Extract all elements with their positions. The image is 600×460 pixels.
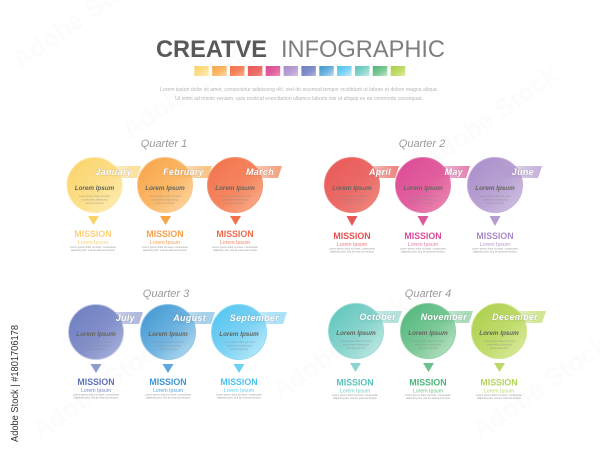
step: December: sed do eiusmod: [490, 346, 509, 350]
intro text: [160, 87, 438, 102]
step: June: Lorem ipsum dolor sit amet, consectetur: [472, 246, 518, 250]
step: July: [68, 304, 143, 400]
step: July: July: [116, 313, 136, 323]
step: July: consectetur adipiscing: [83, 344, 109, 348]
title: CREATVE: [156, 36, 267, 63]
watermark: Adobe Stock: [116, 29, 264, 145]
step: November: sed do eiusmod: [419, 346, 438, 350]
step: March: Lorem ipsum dolor sit amet, consectetur: [212, 245, 258, 249]
step: June: consectetur adipiscing: [482, 198, 508, 202]
step: May: Lorem Ipsum: [408, 242, 438, 248]
step: January: Lorem Ipsum: [75, 185, 115, 192]
step: November: November: [421, 312, 467, 322]
intro text: Ut enim ad minim veniam, quis nostrud exercitation ullamco laboris nisi ut aliquip ex ea commodo consequat.: [175, 96, 423, 102]
step: March: Lorem Ipsum: [220, 240, 250, 246]
heading: quarter 2: Quarter 2: [399, 138, 445, 150]
step: October: consectetur adipiscing: [343, 342, 369, 346]
step: September: Lorem Ipsum: [224, 388, 254, 394]
step: February: adipiscing elit, sed do eiusmod tempor: [143, 248, 187, 252]
step: June: sed do eiusmod: [486, 201, 505, 205]
step: February: February: [163, 167, 205, 177]
step: September: MISSION: [220, 377, 258, 387]
step: May: Lorem Ipsum: [403, 185, 443, 192]
step: May: [396, 158, 470, 254]
step: January: [67, 158, 141, 252]
step: February: Lorem ipsum dolor sit amet, consectetur: [142, 245, 188, 249]
step: January: sed do eiusmod: [85, 201, 104, 205]
step: April: April: [368, 167, 391, 177]
step: September: September: [230, 313, 279, 323]
step: August: MISSION: [149, 377, 187, 387]
step: July: Lorem Ipsum: [81, 388, 111, 394]
step: March: adipiscing elit, sed do eiusmod tempor: [213, 248, 257, 252]
step: November: consectetur adipiscing: [415, 342, 441, 346]
step: September: adipiscing elit, sed do eiusmod tempor: [217, 396, 261, 400]
step: February: Lorem Ipsum: [145, 185, 185, 192]
step: May: consectetur adipiscing: [410, 198, 436, 202]
step: May: May: [445, 167, 464, 177]
step: January: MISSION: [74, 229, 112, 239]
step: April: Lorem ipsum dolor sit amet, consectetur: [329, 246, 375, 250]
step: September: consectetur adipiscing: [226, 344, 252, 348]
step: December: consectetur adipiscing: [486, 342, 512, 346]
heading: quarter 1: Quarter 1: [141, 138, 187, 150]
step: March: consectetur adipiscing: [222, 198, 248, 202]
step: February: Lorem Ipsum: [150, 240, 180, 246]
step: January: consectetur adipiscing: [82, 198, 108, 202]
step: October: MISSION: [336, 378, 374, 388]
step: March: [208, 158, 282, 252]
watermark: Adobe Stock: [416, 59, 564, 175]
colour swatch row: [194, 66, 405, 76]
step: October: Lorem Ipsum: [336, 330, 376, 337]
step: June: June: [512, 167, 534, 177]
step: December: adipiscing elit, sed do eiusmod tempor: [477, 396, 521, 400]
step: August: consectetur adipiscing: [155, 344, 181, 348]
step: April: Lorem ipsum dolor sit amet: [336, 194, 368, 198]
step: December: Lorem ipsum dolor sit amet, consectetur: [476, 393, 522, 397]
step: March: Lorem Ipsum: [215, 185, 255, 192]
step: September: [212, 304, 287, 400]
step: November: Lorem ipsum dolor sit amet, consectetur: [405, 393, 451, 397]
heading: quarter 4: Quarter 4: [405, 288, 451, 300]
step: December: December: [492, 312, 538, 322]
step: April: Lorem Ipsum: [337, 242, 367, 248]
step: July: Lorem Ipsum: [76, 331, 116, 338]
step: August: [140, 304, 215, 400]
step: June: adipiscing elit, sed do eiusmod tempor: [473, 250, 517, 254]
step: December: [472, 304, 546, 400]
step: January: adipiscing elit, sed do eiusmod tempor: [71, 248, 115, 252]
watermark: Adobe Stock: [266, 289, 414, 405]
step: May: Lorem ipsum dolor sit amet, consectetur: [400, 246, 446, 250]
step: November: [400, 304, 473, 400]
step: February: MISSION: [146, 229, 184, 239]
step: March: MISSION: [216, 229, 254, 239]
step: May: sed do eiusmod: [414, 201, 433, 205]
step: November: MISSION: [409, 378, 447, 388]
watermark: Adobe Stock: [26, 329, 174, 445]
step: February: [138, 158, 212, 252]
step: September: sed do eiusmod: [230, 347, 249, 351]
title: INFOGRAPHIC: [281, 36, 445, 63]
step: March: March: [246, 167, 274, 177]
step: April: sed do eiusmod: [343, 201, 362, 205]
step: October: Lorem ipsum dolor sit amet, consectetur: [332, 393, 378, 397]
step: August: August: [172, 313, 207, 323]
step: February: sed do eiusmod: [156, 201, 175, 205]
step: November: Lorem Ipsum: [408, 330, 448, 337]
step: December: Lorem Ipsum: [484, 388, 514, 394]
step: January: Lorem ipsum dolor sit amet, consectetur: [70, 245, 116, 249]
step: June: Lorem ipsum dolor sit amet: [479, 194, 511, 198]
step: October: October: [359, 312, 396, 322]
step: November: Lorem Ipsum: [413, 388, 443, 394]
step: October: Lorem ipsum dolor sit amet: [340, 339, 372, 343]
step: August: Lorem Ipsum: [148, 331, 188, 338]
step: October: [328, 304, 402, 400]
step: August: Lorem ipsum dolor sit amet, consectetur: [145, 392, 191, 396]
step: October: Lorem Ipsum: [340, 388, 370, 394]
step: May: adipiscing elit, sed do eiusmod tempor: [401, 250, 445, 254]
step: March: sed do eiusmod: [226, 201, 245, 205]
step: October: adipiscing elit, sed do eiusmod tempor: [333, 396, 377, 400]
stock id label: Adobe Stock | #1801706178: [10, 325, 21, 442]
step: October: sed do eiusmod: [347, 346, 366, 350]
step: January: Lorem Ipsum: [78, 240, 108, 246]
step: August: Lorem ipsum dolor sit amet: [152, 340, 184, 344]
step: December: Lorem ipsum dolor sit amet: [483, 339, 515, 343]
step: July: Lorem ipsum dolor sit amet: [80, 340, 112, 344]
step: January: Lorem ipsum dolor sit amet: [79, 194, 110, 198]
step: August: Lorem Ipsum: [153, 388, 183, 394]
step: June: Lorem Ipsum: [475, 185, 515, 192]
step: April: MISSION: [333, 231, 371, 241]
step: December: MISSION: [480, 378, 518, 388]
step: January: January: [95, 167, 133, 177]
step: April: [324, 158, 399, 254]
step: September: Lorem Ipsum: [219, 331, 259, 338]
step: April: adipiscing elit, sed do eiusmod tempor: [330, 250, 374, 254]
step: May: MISSION: [404, 231, 442, 241]
heading: quarter 3: Quarter 3: [143, 288, 190, 300]
step: May: Lorem ipsum dolor sit amet: [407, 194, 439, 198]
step: April: Lorem Ipsum: [332, 185, 372, 192]
intro text: Lorem ipsum dolor sit amet, consectetur adipiscing elit, sed do eiusmod tempor incididunt ut labore et dolore magna aliqua.: [160, 87, 438, 93]
step: July: MISSION: [77, 377, 115, 387]
step: March: Lorem ipsum dolor sit amet: [219, 194, 251, 198]
title: [156, 36, 445, 63]
step: September: Lorem ipsum dolor sit amet, consectetur: [216, 392, 262, 396]
step: November: adipiscing elit, sed do eiusmod tempor: [406, 396, 450, 400]
step: June: Lorem Ipsum: [480, 242, 510, 248]
step: November: Lorem ipsum dolor sit amet: [412, 339, 444, 343]
step: July: adipiscing elit, sed do eiusmod tempor: [74, 396, 118, 400]
step: July: Lorem ipsum dolor sit amet, consectetur: [73, 392, 119, 396]
step: December: Lorem Ipsum: [479, 330, 519, 337]
step: June: MISSION: [476, 231, 514, 241]
step: July: sed do eiusmod: [87, 347, 106, 351]
step: April: consectetur adipiscing: [339, 198, 365, 202]
step: August: adipiscing elit, sed do eiusmod tempor: [146, 396, 190, 400]
step: June: [468, 158, 542, 254]
step: September: Lorem ipsum dolor sit amet: [223, 340, 255, 344]
step: February: Lorem ipsum dolor sit amet: [149, 194, 181, 198]
step: August: sed do eiusmod: [159, 347, 178, 351]
step: February: consectetur adipiscing: [152, 198, 178, 202]
